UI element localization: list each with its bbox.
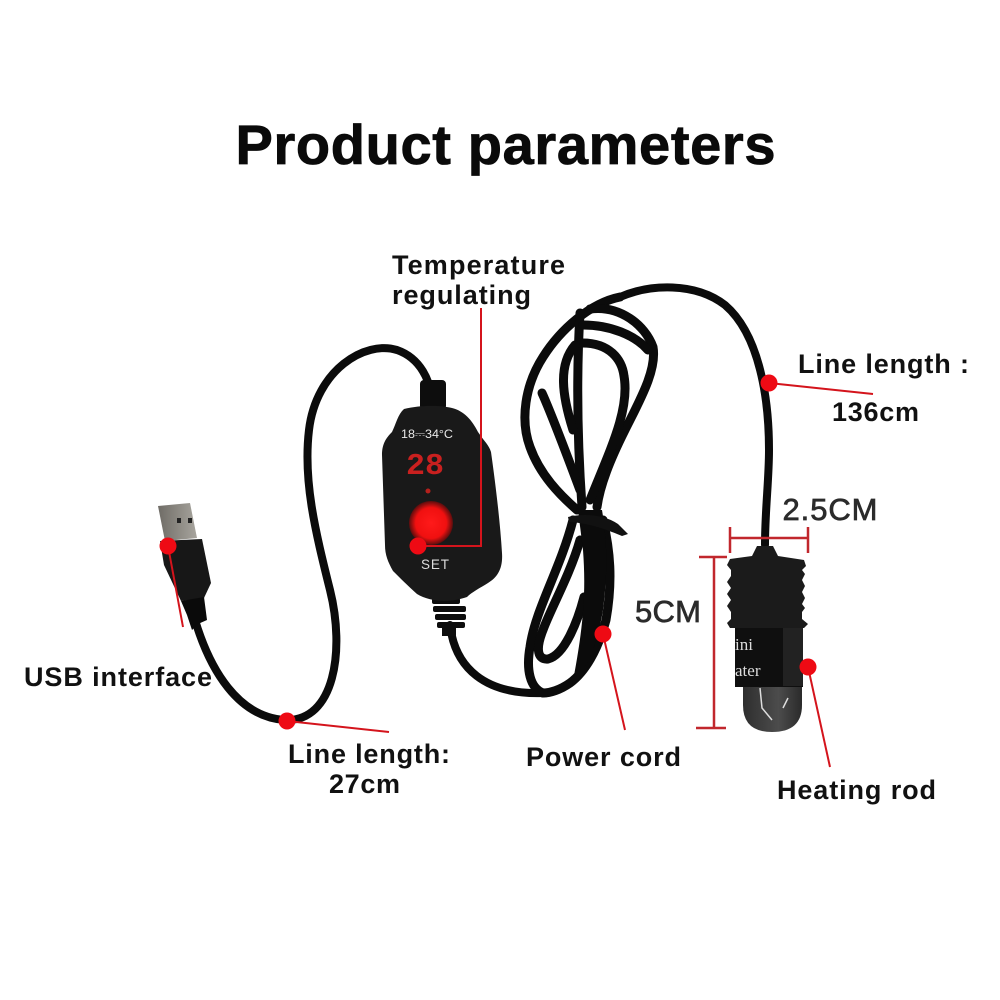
controller body <box>382 406 502 601</box>
power cord and coiled loops <box>450 287 769 693</box>
SET label: SET <box>421 557 449 572</box>
temperature controller <box>382 380 502 636</box>
heating rod <box>727 546 808 732</box>
digital display: 28 <box>406 449 444 484</box>
glowing button <box>409 501 453 545</box>
lower outer left <box>529 520 573 693</box>
central strand <box>578 313 582 507</box>
dimension label 5CM: 5CM <box>635 594 701 629</box>
dimension 2.5CM bracket <box>730 527 808 553</box>
USB cable <box>195 348 433 720</box>
leader lines <box>168 308 873 767</box>
cable tie <box>568 515 628 536</box>
label: power cord: Power cord <box>526 742 681 772</box>
strain relief <box>181 597 207 630</box>
strain reliefs <box>420 380 466 636</box>
metal connector <box>158 503 197 541</box>
label: line length 27cm <box>288 739 450 799</box>
rubber cap <box>727 546 808 628</box>
label: line length 136cm <box>798 349 969 427</box>
label: temperature regulating <box>392 250 565 310</box>
long cord up to heater <box>620 287 769 545</box>
label: line length 27cm: 27cm <box>329 769 400 799</box>
range label: 18⎓34°C <box>401 429 453 441</box>
label: heating rod: Heating rod <box>777 775 936 805</box>
cord from controller to bottom loop <box>450 625 543 693</box>
label: temperature regulating: Temperature <box>392 250 565 280</box>
body print 2: ater <box>735 661 761 680</box>
glass bulb <box>743 680 802 732</box>
body print: ini <box>735 635 753 654</box>
small inner strand <box>542 393 580 490</box>
USB plug <box>158 503 211 630</box>
outer left loop <box>525 297 620 510</box>
label: temperature regulating: regulating <box>392 280 531 310</box>
dimension label 2.5CM: 2.5CM <box>782 492 878 527</box>
label: line length 136cm: Line length : <box>798 349 969 379</box>
lower inner <box>538 540 584 659</box>
right loop <box>590 308 654 507</box>
label: USB interface: USB interface <box>24 662 212 692</box>
label: line length 136cm: 136cm <box>832 397 919 427</box>
central bundle <box>572 510 606 686</box>
inner loop <box>580 343 625 500</box>
lower outer right <box>543 520 610 693</box>
heater body <box>735 620 803 687</box>
plug housing <box>160 539 211 601</box>
dimension 5CM bracket <box>696 557 727 728</box>
callout dots <box>160 374 816 730</box>
title: Product parameters <box>236 113 776 176</box>
label: line length 27cm: Line length: <box>288 739 450 769</box>
indicator dot <box>426 488 430 494</box>
